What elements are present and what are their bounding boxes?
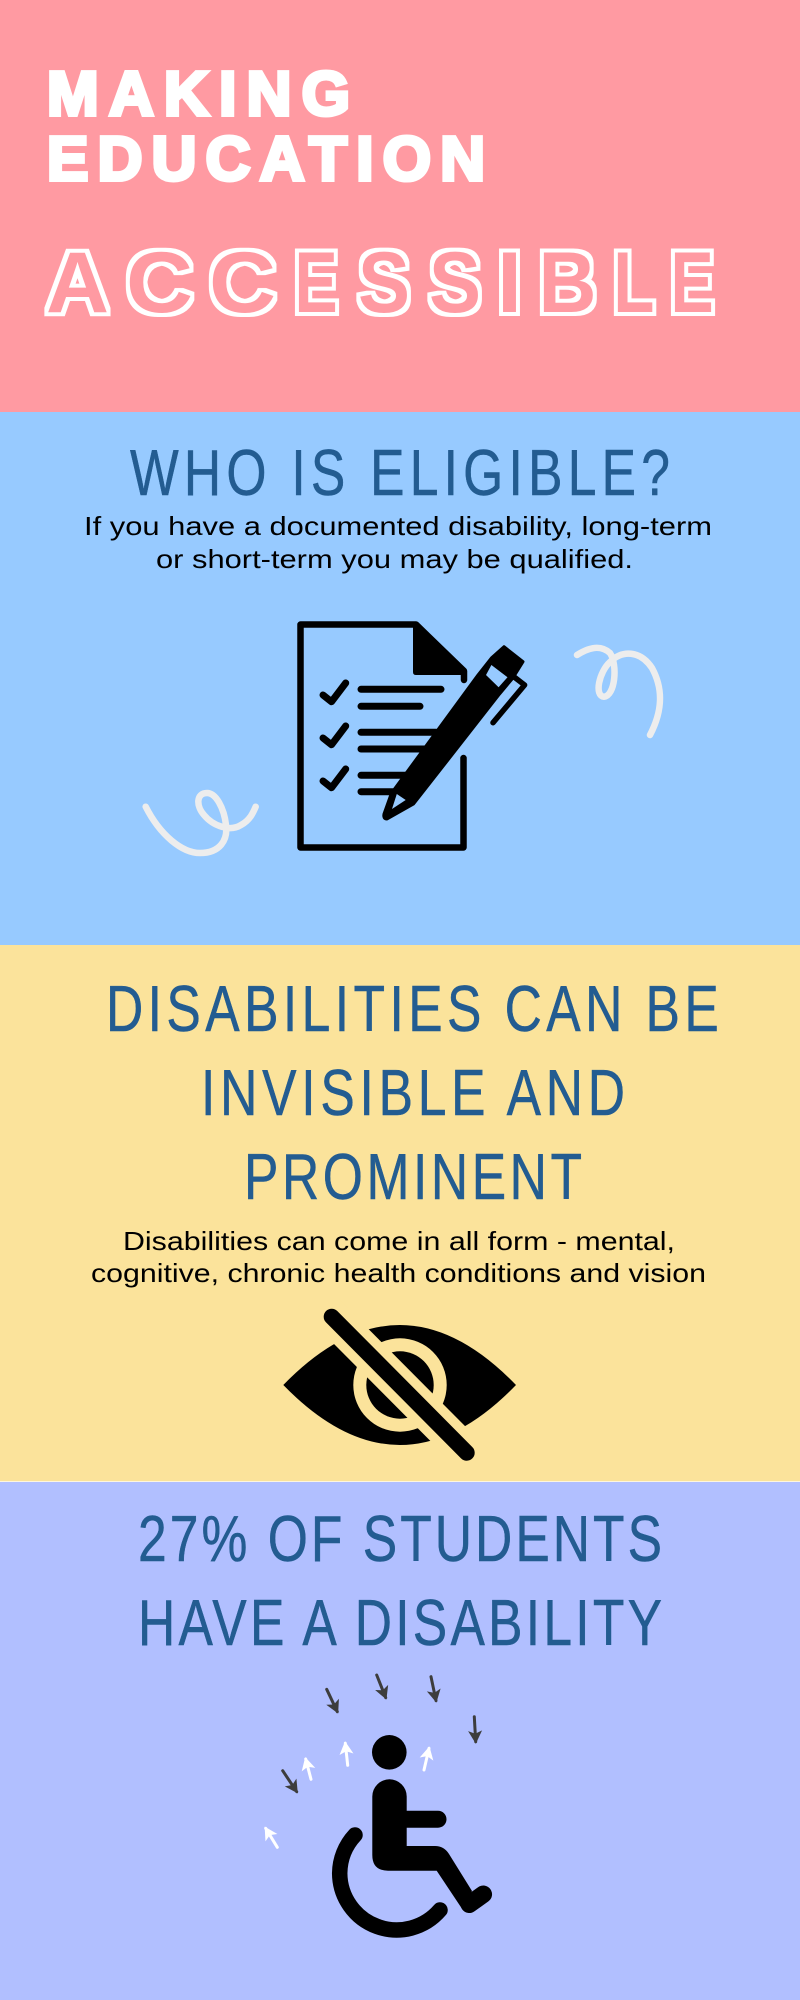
icon: wheelchair user (340, 1735, 483, 1930)
text: eligibility description: or short-term you may be qualified. (156, 544, 633, 574)
title: accessible outlined: E (671, 235, 714, 331)
text: forms of disability (91, 1226, 706, 1288)
title: accessible outlined: C (209, 235, 276, 331)
heading: disabilities can be invisible and prominent (106, 974, 719, 1213)
icon: crossed out eye (283, 1295, 516, 1466)
heading: disabilities can be invisible and prominent: DISABILITIES CAN BE (106, 974, 719, 1045)
heading: disabilities can be invisible and prominent: INVISIBLE AND (201, 1058, 625, 1129)
title: accessible outlined: S (358, 235, 410, 331)
heading: 27% of students have a disability: HAVE A DISABILITY (138, 1588, 662, 1659)
panel: who is eligible (0, 412, 800, 945)
title: accessible outlined: A (46, 235, 109, 331)
heading: 27% of students have a disability: 27% OF STUDENTS (138, 1504, 662, 1575)
text: forms of disability: Disabilities can come in all form - mental, (123, 1226, 675, 1256)
title: making education (47, 60, 485, 194)
icon: checklist document with pen (300, 624, 525, 848)
title: making education: MAKING (47, 60, 350, 129)
panel: title banner (0, 0, 800, 412)
icon: right squiggle (577, 648, 660, 735)
title: accessible outlined: E (295, 235, 338, 331)
heading: who is eligible: WHO IS ELIGIBLE? (130, 438, 670, 509)
icon: dark downward arrows (283, 1675, 476, 1792)
icon: left squiggle (146, 793, 256, 853)
heading: disabilities can be invisible and prominent: PROMINENT (244, 1142, 582, 1213)
text: eligibility description (84, 511, 712, 574)
text: forms of disability: cognitive, chronic health conditions and vision (91, 1258, 706, 1288)
icon: white upward arrows (266, 1743, 429, 1847)
text: eligibility description: If you have a documented disability, long-term (84, 511, 712, 541)
title: accessible outlined: B (538, 235, 596, 331)
title: accessible outlined: C (126, 235, 193, 331)
title: accessible outlined: S (429, 235, 481, 331)
panel: 27 percent of students (0, 1481, 800, 2000)
title: accessible outlined: I (497, 235, 522, 331)
title: accessible outlined: L (613, 235, 654, 331)
panel: disabilities can be invisible (0, 945, 800, 1481)
heading: 27% of students have a disability (138, 1504, 662, 1659)
title: making education: EDUCATION (47, 125, 485, 194)
